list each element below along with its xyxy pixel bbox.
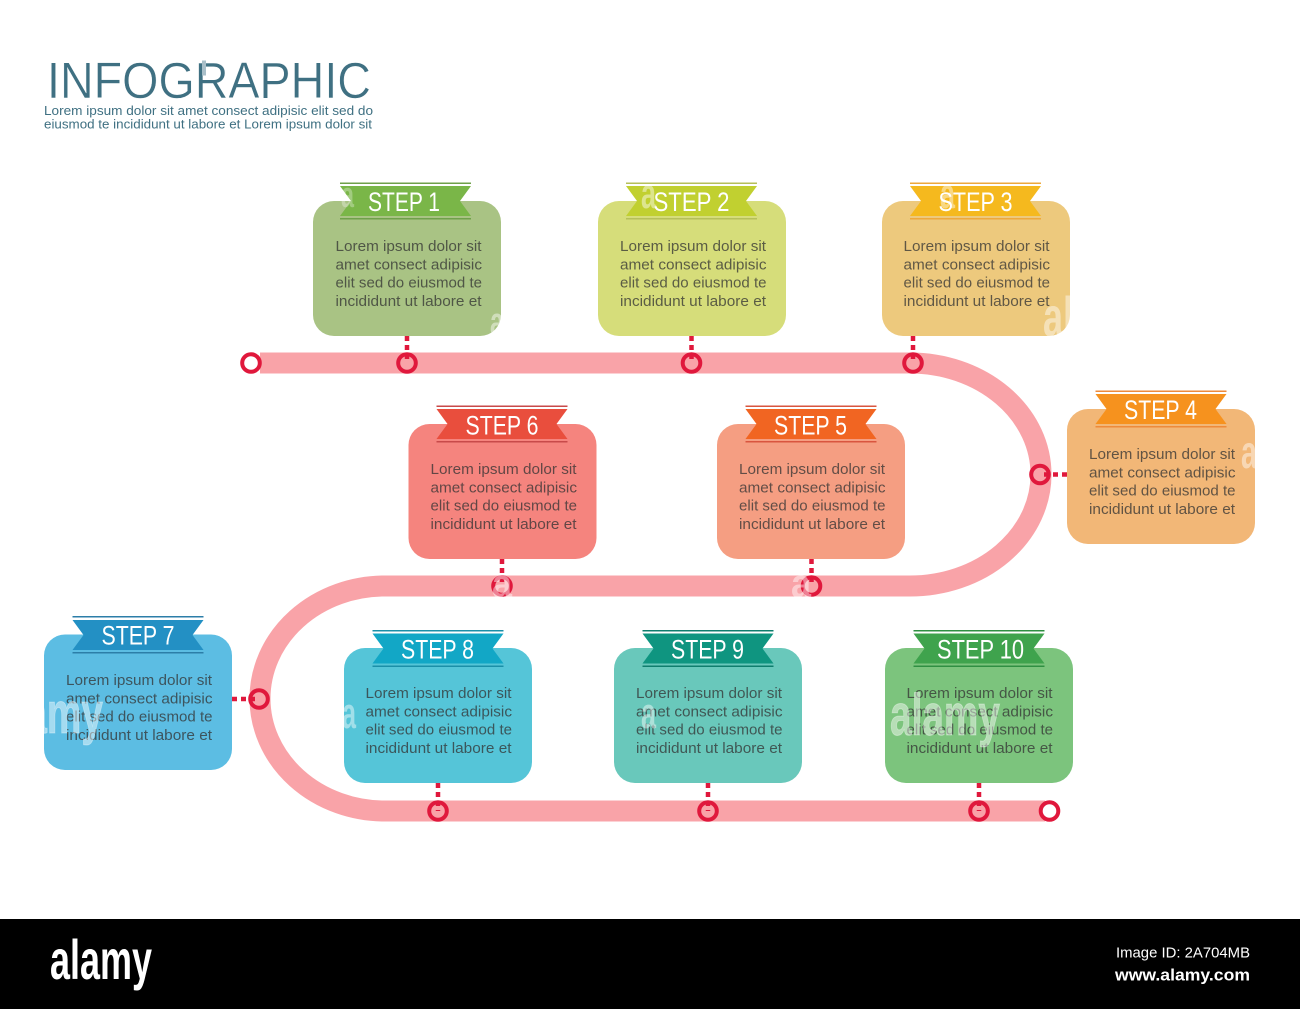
panel: step 4: STEP 4 xyxy=(1124,395,1197,425)
panel: step 4: Lorem ipsum dolor sit xyxy=(1089,447,1235,463)
panel: step 9: incididunt ut labore et xyxy=(636,741,782,757)
watermark text: a xyxy=(641,689,656,738)
watermark text xyxy=(0,170,1257,748)
panel: step 6: Lorem ipsum dolor sit xyxy=(430,462,576,478)
panel: step 10: incididunt ut labore et xyxy=(906,741,1052,757)
panel: step 2: elit sed do eiusmod te xyxy=(620,276,766,292)
panel: step 4 xyxy=(1067,390,1255,544)
panel: step 3 xyxy=(882,182,1070,336)
panel: step 5: amet consect adipisic xyxy=(739,480,886,496)
panel: step 7: STEP 7 xyxy=(102,620,174,650)
panel: step 2: STEP 2 xyxy=(654,187,730,217)
panel: step 10: STEP 10 xyxy=(937,634,1024,664)
panel: step 6: incididunt ut labore et xyxy=(430,517,576,533)
panel: step 10: Lorem ipsum dolor sit xyxy=(906,686,1052,702)
panel: step 3: incididunt ut labore et xyxy=(904,294,1050,310)
panel: step 2: amet consect adipisic xyxy=(620,257,766,273)
panel: step 5 xyxy=(717,406,905,559)
watermark text: a xyxy=(791,562,812,606)
title: INFOGRAPHIC xyxy=(47,52,371,109)
watermark text: a xyxy=(940,170,956,218)
watermark text: a xyxy=(342,689,356,738)
panel: step 7: amet consect adipisic xyxy=(66,691,212,707)
connectors and markers xyxy=(232,336,1067,820)
panel: step 4: amet consect adipisic xyxy=(1089,465,1236,481)
panel: step 4: incididunt ut labore et xyxy=(1089,502,1235,518)
panel: step 6: amet consect adipisic xyxy=(430,480,577,496)
panel: step 8: amet consect adipisic xyxy=(366,704,512,720)
watermark text: a xyxy=(1241,426,1257,478)
panel: step 10: amet consect adipisic xyxy=(906,704,1053,720)
panel: step 8: STEP 8 xyxy=(401,634,474,664)
panel: step 2: Lorem ipsum dolor sit xyxy=(620,239,766,255)
panel: step 8: incididunt ut labore et xyxy=(366,741,512,757)
panel: step 1 xyxy=(313,182,501,336)
footer bar xyxy=(0,919,1300,1009)
panel: step 6 xyxy=(408,406,596,559)
panel: step 4: elit sed do eiusmod te xyxy=(1089,484,1236,500)
panel: step 7: Lorem ipsum dolor sit xyxy=(66,673,212,689)
panel: step 1: STEP 1 xyxy=(368,187,440,217)
panel: step 10 xyxy=(885,630,1073,783)
panel: step 2: incididunt ut labore et xyxy=(620,294,766,310)
panel: step 9: elit sed do eiusmod te xyxy=(636,723,782,739)
footer image id and url: Image ID: 2A704MB xyxy=(1116,944,1250,962)
panel: step 3: STEP 3 xyxy=(938,187,1012,217)
watermark text: a xyxy=(341,174,355,215)
panel: step 1: incididunt ut labore et xyxy=(336,294,482,310)
panel: step 6: STEP 6 xyxy=(466,410,538,440)
panel: step 6: elit sed do eiusmod te xyxy=(430,499,577,515)
watermark text: a xyxy=(641,170,657,218)
panel: step 2 xyxy=(598,182,786,336)
panel: step 10: elit sed do eiusmod te xyxy=(906,723,1053,739)
watermark text: a xyxy=(492,562,513,606)
panel: step 7 xyxy=(44,616,232,770)
footer image id and url: www.alamy.com xyxy=(1114,966,1250,984)
subtitle text block: eiusmod te incididunt ut labore et Lorem ipsum dolor sit xyxy=(44,116,372,132)
subtitle text block: Lorem ipsum dolor sit amet consect adipisic elit sed do xyxy=(44,103,373,118)
panel: step 9 xyxy=(614,630,802,783)
panel: step 3: Lorem ipsum dolor sit xyxy=(904,239,1050,255)
footer image id and url xyxy=(1114,944,1250,984)
panel: step 5: STEP 5 xyxy=(774,410,847,440)
subtitle text block xyxy=(44,103,373,132)
panel: step 5: elit sed do eiusmod te xyxy=(739,499,886,515)
panel: step 9: amet consect adipisic xyxy=(636,704,782,720)
panel: step 1: amet consect adipisic xyxy=(336,257,482,273)
footer logo: alamy xyxy=(50,928,152,991)
panel: step 1: Lorem ipsum dolor sit xyxy=(336,239,482,255)
panel: step 3: amet consect adipisic xyxy=(904,257,1050,273)
panel: step 7: incididunt ut labore et xyxy=(66,728,212,744)
watermark text: al xyxy=(1043,285,1073,348)
watermark text: a xyxy=(490,300,504,344)
watermark text: alamy xyxy=(890,683,1000,748)
panel: step 8 xyxy=(344,630,532,783)
winding road path xyxy=(260,363,1045,811)
panel: step 8: elit sed do eiusmod te xyxy=(366,723,512,739)
panel: step 1: elit sed do eiusmod te xyxy=(336,276,482,292)
panel: step 9: STEP 9 xyxy=(671,634,744,664)
panel: step 5: Lorem ipsum dolor sit xyxy=(739,462,885,478)
panel: step 7: elit sed do eiusmod te xyxy=(66,710,212,726)
panel: step 3: elit sed do eiusmod te xyxy=(904,276,1050,292)
panel: step 9: Lorem ipsum dolor sit xyxy=(636,686,782,702)
panel: step 8: Lorem ipsum dolor sit xyxy=(366,686,512,702)
panel: step 5: incididunt ut labore et xyxy=(739,517,885,533)
